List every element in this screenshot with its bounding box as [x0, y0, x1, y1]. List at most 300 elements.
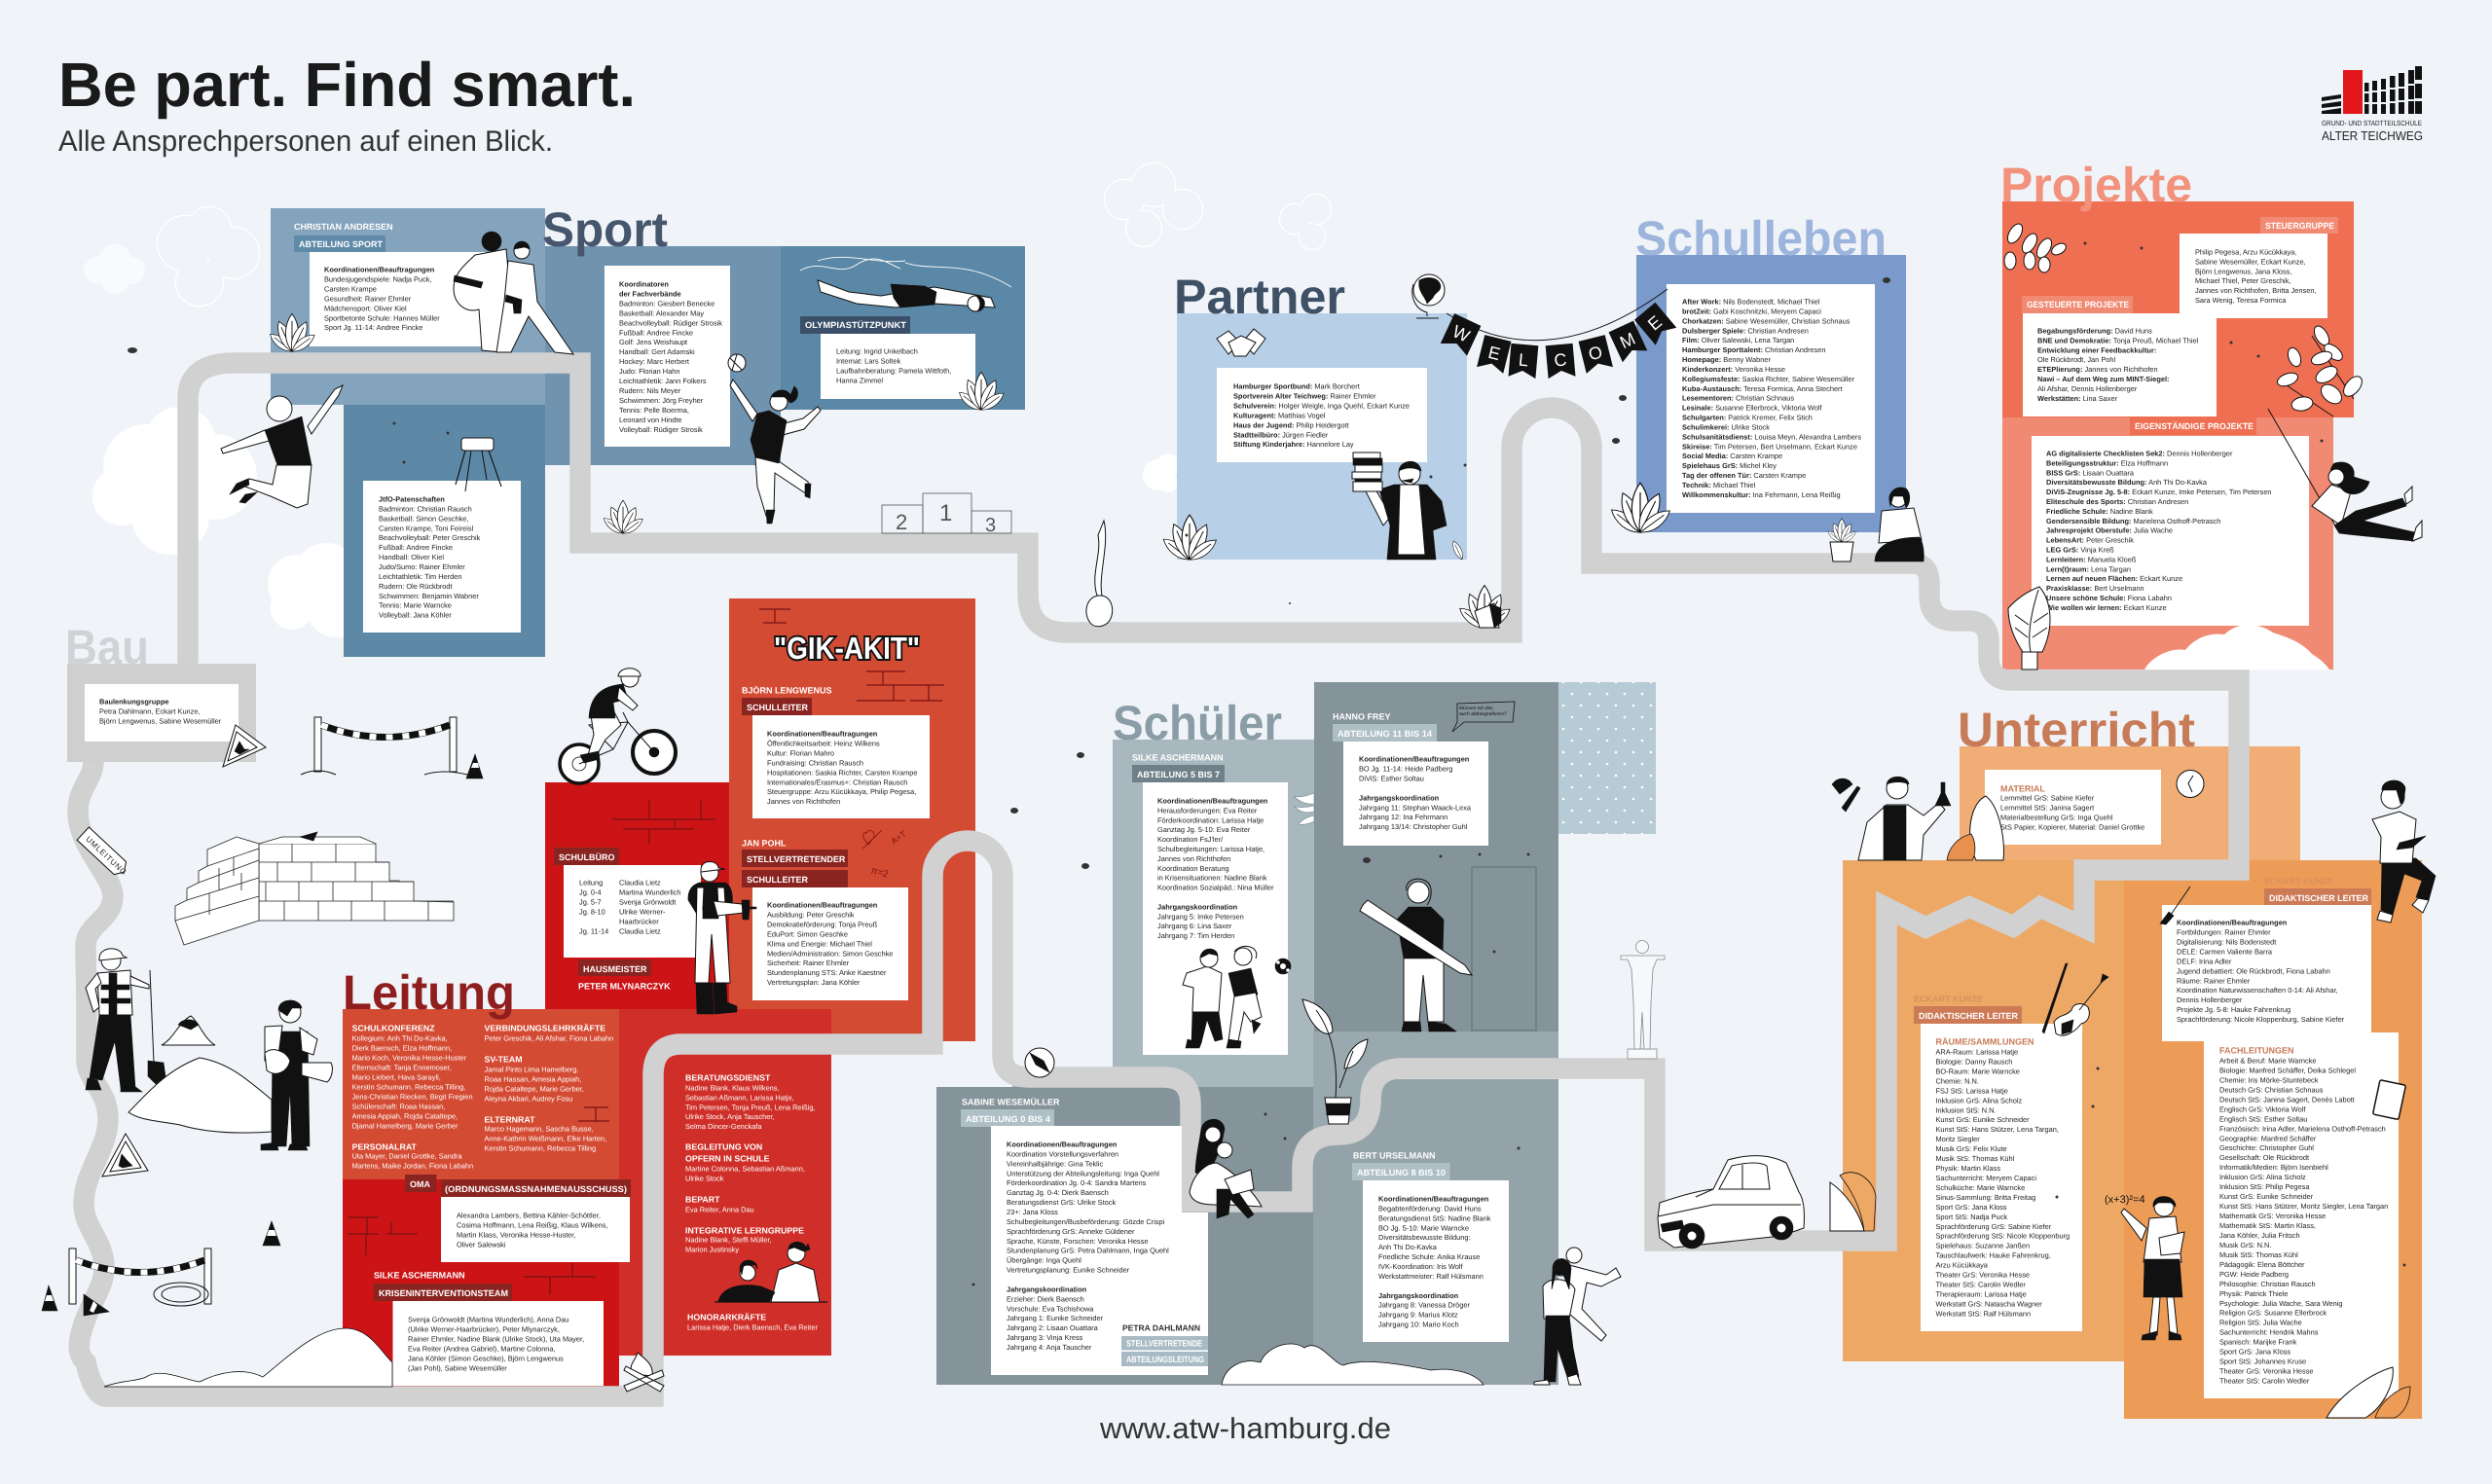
icon: road sign top	[223, 725, 266, 767]
text box: Koordinationen: Sport Jg. 11-14: Andree Fincke	[324, 323, 422, 332]
text box: JtfO-Patenschaften	[363, 481, 521, 633]
section: Räume/Sammlungen: FSJ StS: Larissa Hatje	[1935, 1086, 2008, 1095]
section: Fachleitungen: Spanisch: Marijke Frank	[2219, 1338, 2297, 1347]
text box: Schulleben: Schulgarten: Patrick Kremer, Felix Stich	[1682, 414, 1813, 422]
section: Schulkonferenz, Personalrat: Kerstin Schumann, Rebecca Tilling,	[352, 1082, 465, 1092]
section: Beratungsdienst: Ulrike Stock	[685, 1174, 724, 1183]
section: Fachleitungen: Kunst StS: Hans Stützer, Moritz Siegler, Lena Targan	[2219, 1202, 2388, 1211]
icon: mound	[162, 1016, 215, 1045]
section: Kriseninterventionsteam: KRISENINTERVENTIONSTEAM	[379, 1288, 508, 1298]
text box: Schulleben: Tag der offenen Tür: Carsten Krampe	[1682, 471, 1806, 480]
section: Verbindungslehrkräfte, SV-Team, Elternrat: SV-TEAM	[485, 1055, 523, 1065]
section: Abteilung 5 bis 7: Koordination Beratung	[1157, 864, 1229, 873]
cloud: Projekte	[2144, 625, 2329, 670]
section: Stellvertretender Schulleiter	[742, 839, 908, 1000]
section: Räume/Sammlungen: Schulküche: Marie Warncke	[1935, 1183, 2025, 1192]
section: Schulkonferenz, Personalrat: PERSONALRAT	[352, 1142, 418, 1152]
text box: JtfO-Patenschaften: Judo/Sumo: Rainer Ehmler	[379, 562, 465, 571]
section: Fachleitungen: Sachunterricht: Hendrik Mahns	[2219, 1328, 2319, 1337]
section: Abteilung 0 bis 4: Stundenplanung GrS: Petra Dahlmann, Inga Quehl	[1007, 1247, 1169, 1255]
section: Fachleitungen: Geographie: Manfred Schäffer	[2219, 1134, 2317, 1142]
section: Didaktischer Leiter, Koordinationen: Dennis Hollenberger	[2177, 995, 2243, 1004]
icon: tall plant	[1086, 521, 1113, 627]
section: Beratungsdienst: Larissa Hatje, Dierk Baensch, Eva Reiter	[687, 1323, 818, 1331]
panel background: Partner	[1177, 313, 1467, 560]
section: Abteilung 0 bis 4: Vorschule: Eva Tschishowa	[1007, 1304, 1094, 1313]
section: Räume/Sammlungen: ARA-Raum: Larissa Hatje	[1935, 1047, 2018, 1057]
section: Räume/Sammlungen: Kunst StS: Hans Stützer, Lena Targan,	[1935, 1125, 2059, 1134]
section: Eigenständige Projekte: Beteiligungsstruktur: Elza Hoffmann	[2046, 458, 2168, 467]
icon: brick sketches	[348, 609, 944, 1294]
section: Abteilung 0 bis 4: Jahrgangskoordination	[1007, 1285, 1087, 1293]
text box: Koordinatoren der Fachverbände: Hockey: Marc Herbert	[619, 357, 689, 366]
text box: Schulleben: Lesementoren: Christian Schnaus	[1682, 394, 1794, 403]
section: Verbindungslehrkräfte, SV-Team, Elternrat	[485, 1024, 613, 1152]
section: Beratungsdienst	[685, 1072, 818, 1331]
text box: Schulleben: Dulsberger Spiele: Christian Andresen	[1682, 326, 1809, 335]
graffiti: "GIK-AKIT"	[774, 631, 920, 666]
text box: Schulleben: Schulimkerei: Ulrike Stock	[1682, 422, 1770, 431]
section: Schulkonferenz, Personalrat: Mario Koch, Veronika Hesse-Huster	[352, 1053, 467, 1063]
section: Material: StS Papier, Kopierer, Material: Daniel Grottke	[2000, 823, 2144, 831]
section: Schulbüro, Hausmeister: Jg. 0-4	[579, 887, 602, 896]
section: Abteilung 5 bis 7: Koordination FsJ'ler/	[1157, 835, 1224, 844]
section: Eigenständige Projekte: Lernen auf neuen Flächen: Eckart Kunze	[2046, 574, 2182, 583]
icon: paintbrush	[2160, 887, 2190, 924]
section: Material: MATERIAL	[2000, 784, 2045, 794]
text box: Koordinatoren der Fachverbände: Basketball: Alexander May	[619, 308, 704, 317]
section: Sport, Abteilung: CHRISTIAN ANDRESEN	[294, 222, 393, 232]
section: Räume/Sammlungen: Tauschlaufwerk: Hauke Fahrenkrug,	[1935, 1251, 2051, 1260]
logo: Grund- und Stadtteilschule Alter Teichweg: GRUND- UND STADTTEILSCHULE	[2322, 119, 2422, 127]
section: Schulleiter: Internationales/Erasmus+: Christian Rausch	[767, 778, 907, 786]
section: Didaktischer Leiter, Koordinationen: DIDAKTISCHER LEITER	[2269, 893, 2368, 903]
icon: couple piggyback	[1534, 1248, 1621, 1385]
section: Schulbüro, Hausmeister: Svenja Grönwoldt	[619, 897, 676, 906]
section: Fachleitungen: Theater StS: Carolin Wedler	[2219, 1377, 2310, 1386]
section: Abteilung 5 bis 7: Herausforderungen: Eva Reiter	[1157, 806, 1258, 814]
section: Räume/Sammlungen: Sachunterricht: Meryem Capaci	[1935, 1174, 2036, 1182]
text box: JtfO-Patenschaften: Basketball: Simon Geschke,	[379, 514, 468, 523]
section: Schulkonferenz, Personalrat: Dierk Baensch, Elza Hoffmann,	[352, 1043, 452, 1053]
text box: Schulleben: Film: Oliver Salewski, Lena Targan	[1682, 336, 1794, 344]
section: Kriseninterventionsteam: (Ulrike Werner-Haarbrücker), Peter Mlynarczyk,	[408, 1324, 560, 1333]
section: Abteilung 8 bis 10: BO Jg. 5-10: Marie Warncke	[1378, 1223, 1469, 1232]
section: Abteilung 11 bis 14: Jahrgang 11: Stephan Waack-Lexa	[1359, 803, 1472, 812]
text box: Partner: Haus der Jugend: Philip Heidergott	[1233, 420, 1349, 429]
section: Steuergruppe: Sabine Wesemüller, Eckart Kunze,	[2195, 257, 2306, 266]
section: Fachleitungen: Sport StS: Johannes Kruse	[2219, 1357, 2306, 1366]
icon: man with pencil	[1360, 879, 1472, 1032]
icon: architect worker	[261, 1000, 332, 1150]
text box: Koordinationen: Sportbetonte Schule: Hannes Müller	[324, 313, 440, 322]
heading: Bau: Bau	[65, 620, 149, 674]
section: Schulbüro, Hausmeister: Haarbrücker	[619, 917, 659, 925]
section: Abteilung 11 bis 14: Jahrgang 12: Ina Fehrmann	[1359, 813, 1448, 821]
section: Abteilung 11 bis 14: BO Jg. 11-14: Heide Padberg	[1359, 764, 1452, 773]
section: Verbindungslehrkräfte, SV-Team, Elternrat: ELTERNRAT	[485, 1115, 535, 1125]
welcome banner: O	[1587, 343, 1604, 364]
section: Schulkonferenz, Personalrat: Schülerschaft: Roaa Hassan,	[352, 1102, 445, 1111]
text box: Koordinatoren der Fachverbände: Schwimmen: Jörg Freyher	[619, 396, 704, 405]
cloud: Schüler	[1222, 1344, 1484, 1385]
section: Fachleitungen: Mathematik StS: Martin Klass,	[2219, 1221, 2316, 1230]
text box: Schulleben: Schulsanitätsdienst: Louisa Meyn, Alexandra Lambers	[1682, 432, 1861, 441]
section: Verbindungslehrkräfte, SV-Team, Elternrat: Aleyna Akbari, Audrey Fosu	[485, 1094, 572, 1104]
section: Schulkonferenz, Personalrat: Jens-Christian Riecken, Birgit Fregien	[352, 1092, 473, 1102]
section: Fachleitungen: Englisch StS: Esther Soltau	[2219, 1114, 2307, 1123]
section: Kriseninterventionsteam: Eva Reiter (Andrea Gabriel), Martine Colonna,	[408, 1344, 556, 1353]
section: Schulkonferenz, Personalrat: Djamal Hamelberg, Marie Gerber	[352, 1121, 458, 1131]
section: Räume/Sammlungen: Sinus-Sammlung: Britta Freitag	[1935, 1193, 2035, 1202]
text box: Schulleben: Chorkatzen: Sabine Wesemüller, Christian Schnaus	[1682, 316, 1850, 325]
section: Abteilung 0 bis 4: Viereinhalbjährige: Gina Teklic	[1007, 1159, 1103, 1168]
podium: 2	[896, 510, 907, 534]
text box: Schulleben: brotZeit: Gabi Koschnitzki, Meryem Capaci	[1682, 307, 1821, 315]
section: Fachleitungen: Inklusion StS: Philip Pegesa	[2219, 1182, 2310, 1191]
text box: Schulleben: Willkommenskultur: Ina Fehrmann, Lena Reißig	[1682, 490, 1841, 499]
section: Didaktischer Leiter, Koordinationen: Jugend debattiert: Ole Rückbrodt, Fiona Labahn	[2177, 966, 2330, 975]
section: Schulbüro, Hausmeister	[554, 848, 701, 991]
section: Abteilung 8 bis 10: Jahrgang 8: Vanessa Dröger	[1378, 1301, 1470, 1310]
section: Material: Lernmittel GrS: Sabine Kiefer	[2000, 794, 2095, 802]
section: Schulkonferenz, Personalrat: Amesia Appiah, Rojda Cataltepe,	[352, 1111, 458, 1121]
footer url: www.atw-hamburg.de	[1099, 1413, 1391, 1445]
section: Didaktischer Leiter, Koordinationen: Fortbildungen: Rainer Ehmler	[2177, 927, 2271, 936]
section: Schulbüro, Hausmeister: Ulrike Werner-	[619, 907, 666, 916]
text box: Schulleben: Kollegiumsfeste: Saskia Richter, Sabine Wesemüller	[1682, 375, 1854, 383]
icon: compass	[1025, 1048, 1054, 1077]
section: Olympiastützpunkt: OLYMPIASTÜTZPUNKT	[805, 320, 907, 330]
section: Kriseninterventionsteam: (Jan Pohl), Sabine Wesemüller	[408, 1363, 507, 1372]
section: Eigenständige Projekte: Gendersensible Bildung: Marielena Osthoff-Petrasch	[2046, 517, 2220, 525]
section: Schulkonferenz, Personalrat: Mario Liebert, Hava Sarayli,	[352, 1072, 441, 1082]
section: Eigenständige Projekte: DiViS-Zeugnisse Jg. 5-8: Eckart Kunze, Imke Petersen, Tim Petersen	[2046, 488, 2272, 496]
text box: Schulleben: Kinderkonzert: Veronika Hesse	[1682, 365, 1785, 374]
plants: Partner	[1160, 515, 1465, 564]
icon: kneeling woman	[1826, 488, 1924, 561]
section: Stellvertretender Schulleiter: JAN POHL	[742, 839, 787, 849]
section: Räume/Sammlungen: Arzu Kücükkaya	[1935, 1261, 1989, 1270]
panel backgrounds: Unterricht	[1843, 746, 2422, 1419]
text box: Schulleben: Social Media: Carsten Krampe	[1682, 452, 1782, 460]
text box: Koordinatoren der Fachverbände: Tennis: Pelle Boerma,	[619, 406, 689, 415]
section: Stellvertretende Abteilungsleitung: ABTEILUNGSLEITUNG	[1126, 1355, 1204, 1364]
icon: scientist	[1832, 777, 1951, 860]
section: Abteilung 11 bis 14: DiViS: Esther Soltau	[1359, 774, 1424, 782]
section: Abteilung 0 bis 4	[961, 1098, 1208, 1375]
section: Eigenständige Projekte: Diversitätsbewusste Bildung: Anh Thi Do-Kavka	[2046, 478, 2207, 487]
section: Abteilung 0 bis 4: Förderkoordination Jg. 0-4: Sandra Martens	[1007, 1178, 1147, 1187]
section: Fachleitungen: Biologie: Manfred Schäffer, Deika Schlegel	[2219, 1066, 2356, 1074]
section: Abteilung 0 bis 4: 23+: Jana Kloss	[1007, 1208, 1058, 1216]
globe	[1412, 274, 1445, 318]
section: Steuergruppe: Björn Lengwenus, Jana Kloss,	[2195, 267, 2291, 275]
section: Räume/Sammlungen: Sprachförderung GrS: Sabine Kiefer	[1935, 1222, 2052, 1231]
section: Abteilung 0 bis 4: Ganztag Jg. 0-4: Dierk Baensch	[1007, 1188, 1109, 1197]
icon: tablet	[2373, 1080, 2405, 1120]
welcome banner: E	[1486, 343, 1502, 364]
text box: Koordinationen	[310, 252, 486, 346]
section: Abteilung 0 bis 4: Schulbegleitungen/Busbeförderung: Gözde Crispi	[1007, 1217, 1165, 1226]
icon: plant in pot Projekte	[2008, 587, 2050, 670]
text box: Koordinatoren der Fachverbände: Leichtathletik: Jann Folkers	[619, 377, 707, 385]
section: Fachleitungen: Theater GrS: Veronika Hesse	[2219, 1367, 2314, 1376]
section: Räume/Sammlungen: ECKART KUNZE	[1914, 995, 1983, 1004]
cloud: Leitung bottom	[104, 1328, 392, 1387]
section: Fachleitungen: Physik: Patrick Thiele	[2219, 1289, 2289, 1298]
section: Didaktischer Leiter, Koordinationen: DELF: Irina Adler	[2177, 957, 2232, 965]
section: Verbindungslehrkräfte, SV-Team, Elternrat: Jamal Pinto Lima Hamelberg,	[485, 1065, 578, 1074]
section: Abteilung 8 bis 10: Friedliche Schule: Anika Krause	[1378, 1252, 1480, 1261]
section: Fachleitungen: Gesellschaft: Ole Rückbrodt	[2219, 1153, 2309, 1162]
section: Fachleitungen: Psychologie: Julia Wache, Sara Wenig	[2219, 1299, 2343, 1308]
section: Abteilung 0 bis 4: Koordination Vorstellungsverfahren	[1007, 1149, 1118, 1158]
section: Verbindungslehrkräfte, SV-Team, Elternrat: Kerstin Schumann, Rebecca Tilling	[485, 1144, 596, 1152]
icon: bonfire	[624, 1353, 664, 1392]
podium	[882, 493, 1011, 536]
text box: JtfO-Patenschaften: Beachvolleyball: Peter Greschik	[379, 533, 481, 542]
welcome banner: L	[1518, 350, 1529, 370]
text box: Koordinatoren der Fachverbände: Handball: Gert Adamski	[619, 347, 695, 356]
section: Schulbüro, Hausmeister: Jg. 8-10	[579, 907, 605, 916]
section: Gesteuerte Projekte: Ali Afshar, Dennis Hollenberger	[2037, 384, 2138, 393]
section: Didaktischer Leiter, Koordinationen: Koordinationen/Beauftragungen	[2177, 919, 2288, 926]
section: Abteilung 8 bis 10: Jahrgang 9: Marius Klotz	[1378, 1311, 1458, 1320]
section: Abteilung 8 bis 10: Jahrgang 10: Mario Koch	[1378, 1321, 1459, 1329]
icon: leaves Unterricht top	[1947, 796, 2003, 860]
text box: Partner: Stiftung Kinderjahre: Hannelore Lay	[1233, 440, 1354, 449]
section: Kriseninterventionsteam: SILKE ASCHERMANN	[374, 1271, 465, 1281]
section: Eigenständige Projekte: Praxisklasse: Bert Urselmann	[2046, 584, 2144, 593]
icon: road sign lower	[102, 1134, 148, 1176]
section: Abteilung 11 bis 14: Koordinationen/Beauftragungen	[1359, 755, 1470, 763]
section: Abteilung 5 bis 7: in Krisensituationen: Nadine Blank	[1157, 874, 1267, 883]
section: OMA Ordnungsmaßnahmenausschuss: Alexandra Lambers, Bettina Kähler-Schöttler,	[457, 1211, 601, 1220]
section: Abteilung 8 bis 10: Anh Thi Do-Kavka	[1378, 1243, 1438, 1251]
section: Stellvertretender Schulleiter: Medien/Administration: Simon Geschke	[767, 949, 893, 958]
icon: tutor and student	[715, 1242, 827, 1302]
section: OMA Ordnungsmaßnahmenausschuss: Cosima Hoffmann, Lena Reißig, Klaus Wilkens,	[457, 1220, 608, 1229]
text box: Koordinatoren der Fachverbände: Rudern: Nils Meyer	[619, 386, 681, 395]
section: Didaktischer Leiter, Koordinationen: Digitalisierung: Nils Bodenstedt	[2177, 937, 2276, 946]
text box: Koordinationen: Mädchensport: Oliver Kiel	[324, 304, 407, 312]
section: Fachleitungen: Französisch: Irina Adler, Marielena Osthoff-Petrasch	[2219, 1124, 2386, 1133]
section: Eigenständige Projekte: Wie wollen wir lernen: Eckart Kunze	[2046, 603, 2167, 612]
text box: Partner: Kulturagent: Matthias Vogel	[1233, 411, 1325, 419]
text box: Partner: Hamburger Sportbund: Mark Borchert	[1233, 381, 1360, 391]
section: OMA Ordnungsmaßnahmenausschuss: OMA	[410, 1179, 430, 1189]
icon: leaves Unterricht bottom	[1830, 1173, 2410, 1418]
icon: house on path	[1456, 586, 1513, 632]
section: Gesteuerte Projekte: ETEPlierung: Jannes von Richthofen	[2037, 365, 2158, 374]
subtitle: Alle Ansprechpersonen auf einen Blick.	[58, 126, 553, 158]
clouds	[84, 163, 1331, 637]
section: Abteilung 0 bis 4: ABTEILUNG 0 BIS 4	[966, 1114, 1050, 1124]
section: Olympiastützpunkt: Laufbahnberatung: Pamela Wittfoth,	[836, 366, 951, 375]
title: Be part. Find smart.	[58, 50, 636, 120]
panel background: Schulleben	[1636, 255, 1906, 532]
panel: Bau	[67, 664, 256, 762]
section: Olympiastützpunkt: Internat: Lars Soltek	[836, 356, 900, 365]
section: Gesteuerte Projekte: Nawi – Auf dem Weg zum MINT-Siegel:	[2037, 375, 2170, 383]
welcome banner: W	[1449, 321, 1473, 346]
section: Beratungsdienst: Nadine Blank, Klaus Wilkens,	[685, 1084, 780, 1092]
section: Fachleitungen: Englisch GrS: Viktoria Wolf	[2219, 1104, 2306, 1113]
icon: barrier bottom	[69, 1249, 211, 1306]
section: Kriseninterventionsteam: Svenja Grönwoldt (Martina Wunderlich), Anna Dau	[408, 1316, 568, 1323]
section: Räume/Sammlungen: Theater StS: Carolin Wedler	[1935, 1281, 2026, 1289]
panel backgrounds: Schüler	[936, 682, 1656, 1385]
icon: jumping man	[221, 385, 343, 508]
section: Stellvertretende Abteilungsleitung: STELLVERTRETENDE	[1126, 1339, 1202, 1349]
section: Abteilung 0 bis 4: Jahrgang 1: Eunike Schneider	[1007, 1314, 1104, 1322]
section: Stellvertretender Schulleiter: Demokratieförderung: Tonja Preuß	[767, 920, 878, 928]
icon: vaulting horse	[456, 438, 501, 491]
icon: construction worker with shovel	[86, 949, 165, 1092]
section: Abteilung 0 bis 4: Vertretungsplanung: Eunike Schneider	[1007, 1266, 1130, 1275]
heading: Leitung: Leitung	[343, 965, 515, 1020]
panel backgrounds: Leitung	[343, 598, 975, 1387]
icon: branches	[2004, 221, 2365, 416]
section: Verbindungslehrkräfte, SV-Team, Elternrat: Peter Greschik, Ali Afshar, Fiona Labahn	[485, 1033, 613, 1043]
welcome banner: E	[1644, 311, 1666, 335]
section: Fachleitungen: Pädagogik: Elena Böttcher	[2219, 1260, 2305, 1269]
section: Abteilung 5 bis 7: Jahrgangskoordination	[1157, 902, 1238, 911]
section: Schulleiter	[742, 685, 930, 818]
text box: Koordinatoren der Fachverbände: Golf: Jens Weishaupt	[619, 338, 687, 346]
section: Schulkonferenz, Personalrat: Uta Mayer, Daniel Grottke, Sandra	[352, 1152, 462, 1160]
podium: 3	[985, 515, 996, 536]
logo: Grund- und Stadtteilschule Alter Teichweg	[2322, 66, 2423, 143]
section: Abteilung 5 bis 7	[1132, 753, 1288, 1055]
section: Abteilung 8 bis 10: IVK-Koordination: Iris Wolf	[1378, 1262, 1463, 1271]
section: Schulkonferenz, Personalrat: Kollegium: Anh Thi Do-Kavka,	[352, 1033, 448, 1043]
text box: Koordinationen: Carsten Krampe	[324, 284, 377, 293]
section: Räume/Sammlungen: Physik: Martin Klass	[1935, 1164, 2000, 1173]
tag: Abteilung Sport	[294, 235, 385, 252]
section: Beratungsdienst: Nadine Blank, Steffi Müller,	[685, 1236, 772, 1244]
section: OMA Ordnungsmaßnahmenausschuss: (ORDNUNGSMASSNAHMENAUSSCHUSS)	[445, 1184, 627, 1194]
section: Abteilung 5 bis 7: Schulbegleitungen: Larissa Hatje,	[1157, 845, 1264, 853]
section: Verbindungslehrkräfte, SV-Team, Elternrat: Marco Hagemann, Sascha Busse,	[485, 1125, 594, 1133]
plant: Schulleben	[1608, 483, 1673, 537]
icon: classroom doodles: A+T	[889, 829, 908, 847]
section: Stellvertretender Schulleiter: Stundenplanung STS: Anke Kaestner	[767, 968, 887, 977]
heading: Partner: Partner	[1174, 270, 1345, 324]
section: Stellvertretender Schulleiter: Vertretungsplan: Jana Köhler	[767, 978, 861, 987]
panel backgrounds: Sport	[271, 208, 1025, 657]
icon: trowel	[300, 832, 317, 841]
section: Abteilung 0 bis 4: Sprache, Künste, Forschen: Veronika Hesse	[1007, 1237, 1148, 1246]
icon: kids playing	[1183, 946, 1291, 1048]
text box: Koordinatoren der Fachverbände: Fußball: Andree Fincke	[619, 328, 693, 337]
section: Abteilung 0 bis 4: Sprachförderung GrS: Anneke Güldener	[1007, 1227, 1135, 1236]
section: Abteilung 0 bis 4: Unterstützung der Abteilungsleitung: Inga Quehl	[1007, 1169, 1159, 1177]
section: Gesteuerte Projekte: GESTEUERTE PROJEKTE	[2027, 300, 2129, 309]
section: Schulleiter: Koordinationen/Beauftragungen	[767, 730, 878, 738]
icon: worker with drill	[688, 862, 756, 1014]
icon: woman on swing	[2268, 409, 2422, 541]
section: Fachleitungen: Informatik/Medien: Björn Isenbiehl	[2219, 1163, 2328, 1172]
section: Schulleiter: Hospitationen: Saskia Richter, Carsten Krampe	[767, 768, 917, 777]
icon: mother reading with child	[1190, 1119, 1262, 1218]
icon: plant in pot Schüler	[1302, 999, 1368, 1124]
section: Abteilung 0 bis 4: Jahrgang 2: Lisaan Ouattara	[1007, 1323, 1099, 1332]
section: Schulbüro, Hausmeister: SCHULBÜRO	[559, 852, 615, 862]
section: Räume/Sammlungen: Kunst GrS: Eunike Schneider	[1935, 1115, 2030, 1124]
section: Schulleiter: Steuergruppe: Arzu Kücükkaya, Philip Pegesa,	[767, 787, 916, 796]
section: Didaktischer Leiter, Koordinationen: ECKART KUNZE	[2264, 876, 2333, 886]
section: Eigenständige Projekte: BISS GrS: Lisaan Ouattara	[2046, 468, 2134, 477]
section: Fachleitungen: Deutsch StS: Janina Sagert, Denés Labott	[2219, 1095, 2355, 1104]
section: Verbindungslehrkräfte, SV-Team, Elternrat: Anne-Kathrin Weißmann, Elke Harten,	[485, 1135, 606, 1142]
heading: Schüler: Schüler	[1113, 696, 1282, 750]
section: Eigenständige Projekte: LEG GrS: Vinja Kreß	[2046, 545, 2114, 555]
section: Eigenständige Projekte: Lern(t)raum: Lena Targan	[2046, 564, 2131, 573]
text box: Partner: Sportverein Alter Teichweg: Rainer Ehmler	[1233, 391, 1376, 400]
section: Schulbüro, Hausmeister: Claudia Lietz	[619, 878, 661, 887]
text box: Koordinationen: Koordinationen/Beauftragungen	[324, 265, 435, 274]
section: Fachleitungen: Musik GrS: N.N.	[2219, 1241, 2271, 1249]
section: Beratungsdienst: Eva Reiter, Anna Dau	[685, 1205, 754, 1214]
text box: JtfO-Patenschaften: Volleyball: Jana Köhler	[379, 611, 452, 620]
icon: classroom doodles	[862, 829, 908, 881]
icon: statue	[1621, 940, 1665, 1059]
section: Sport, Abteilung	[294, 222, 486, 346]
section: Stellvertretende Abteilungsleitung	[1121, 1323, 1208, 1366]
section: Steuergruppe: Michael Thiel, Peter Greschik,	[2195, 276, 2290, 285]
icon: vintage car	[1658, 1156, 1804, 1249]
section: Räume/Sammlungen: Theater GrS: Veronika Hesse	[1935, 1271, 2030, 1280]
podium: 1	[939, 500, 952, 526]
section: Abteilung 8 bis 10: BERT URSELMANN	[1353, 1150, 1435, 1160]
section: Gesteuerte Projekte	[2022, 296, 2217, 416]
section: Schulbüro, Hausmeister: Leitung	[579, 878, 603, 887]
section: Kriseninterventionsteam: Rainer Ehmler, Nadine Blank (Ulrike Stock), Uta Mayer,	[408, 1334, 584, 1343]
section: Verbindungslehrkräfte, SV-Team, Elternrat: Rojda Cataltepe, Marie Gerber,	[485, 1084, 584, 1094]
section: Abteilung 5 bis 7: SILKE ASCHERMANN	[1132, 753, 1224, 763]
section: Abteilung 8 bis 10: Beratungsdienst StS: Nadine Blank	[1378, 1213, 1491, 1222]
section: Räume/Sammlungen: Therapieraum: Larissa Hatje	[1935, 1290, 2027, 1299]
section: OMA Ordnungsmaßnahmenausschuss: Oliver Salewski	[457, 1240, 506, 1249]
section: Fachleitungen: Musik StS: Thomas Kühl	[2219, 1250, 2298, 1259]
section: Räume/Sammlungen	[1914, 995, 2082, 1331]
icon: teacher: (x+3)²=4	[2105, 1194, 2145, 1206]
text box: Koordinatoren der Fachverbände: Koordinatoren	[619, 280, 669, 288]
section: Abteilung 0 bis 4: Beratungsdienst GrS: Ulrike Stock	[1007, 1198, 1116, 1207]
section: Steuergruppe: Jannes von Richthofen, Britta Jensen,	[2195, 286, 2316, 295]
icon: classroom doodles: π=2	[869, 865, 890, 881]
section: Abteilung 8 bis 10: Begabtenförderung: David Huns	[1378, 1204, 1482, 1213]
section: Räume/Sammlungen: Werkstatt StS: Ralf Hülsmann	[1935, 1309, 2031, 1318]
section: Stellvertretender Schulleiter: Koordinationen/Beauftragungen	[767, 901, 878, 909]
section: Räume/Sammlungen: Sport GrS: Jana Kloss	[1935, 1203, 2007, 1212]
section: Beratungsdienst: BERATUNGSDIENST	[685, 1072, 771, 1082]
section: Fachleitungen: PGW: Heide Padberg	[2219, 1270, 2289, 1279]
section: Fachleitungen: Religion GrS: Susanne Ellerbrock	[2219, 1309, 2327, 1318]
icon: rubble pile	[128, 1058, 272, 1133]
section: Didaktischer Leiter, Koordinationen: Sprachförderung: Nicole Kloppenburg, Sabine Kiefer	[2177, 1015, 2345, 1024]
section: Didaktischer Leiter, Koordinationen: Koordination Naturwissenschaften 0-14: Ali Afshar,	[2177, 986, 2338, 995]
icon: handshake	[1217, 329, 1265, 356]
section: Räume/Sammlungen: Chemie: N.N.	[1935, 1076, 1979, 1085]
section: Abteilung 5 bis 7: Förderkoordination: Larissa Hatje	[1157, 815, 1264, 824]
section: Abteilung 5 bis 7: Jahrgang 7: Tim Herden	[1157, 931, 1234, 940]
section: Beratungsdienst: INTEGRATIVE LERNGRUPPE	[685, 1226, 804, 1236]
section: Schulleiter: Öffentlichkeitsarbeit: Heinz Wilkens	[767, 739, 880, 747]
section: Schulleiter: BJÖRN LENGWENUS	[742, 685, 832, 695]
